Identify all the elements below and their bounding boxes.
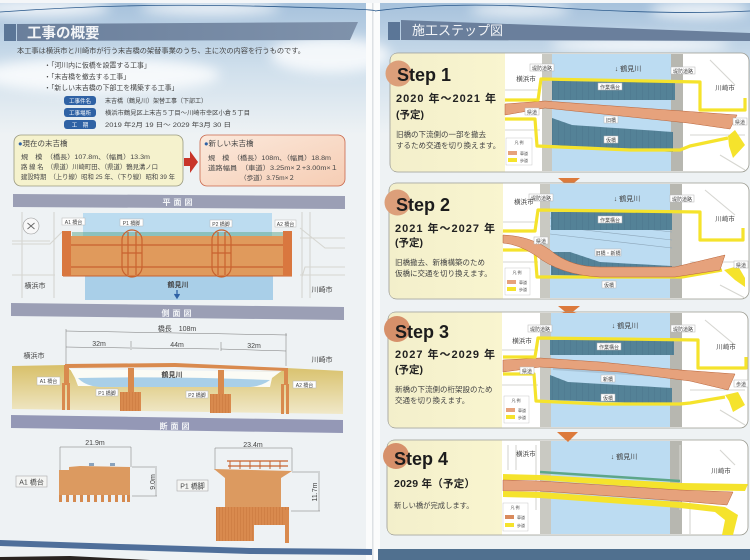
side view diagram: 横浜市 — [24, 351, 44, 360]
map labels: 県道 — [527, 109, 537, 116]
work item list — [44, 60, 178, 92]
section bar: cross-section — [11, 415, 343, 433]
side view diagram: P2 橋脚 — [188, 392, 206, 399]
plan labels — [62, 218, 296, 228]
step 2 text: 仮橋に交通を切り換えます。 — [395, 268, 492, 278]
side view diagram: A2 橋台 — [296, 382, 313, 389]
step 2 text: Step 2 — [396, 195, 450, 215]
panel: new bridge: ●新しい末吉橋 — [204, 138, 254, 148]
step 2 text — [395, 195, 495, 278]
step 2 text: 2021 年～2027 年 — [395, 221, 495, 235]
legend: 車道 — [518, 407, 526, 413]
bridge deck — [65, 363, 287, 371]
icon: step 2 circle — [384, 190, 410, 216]
intro text: 本工事は横浜市と川崎市が行う末吉橋の架替事業のうち、主に次の内容を行うものです。 — [17, 46, 305, 55]
map: step 3: 歩道 — [736, 381, 746, 388]
map: step 2: 横浜市 — [514, 197, 534, 206]
heading: 施工ステップ図 — [388, 20, 750, 41]
step 2 text: (予定) — [395, 237, 423, 249]
map: step 2: 県道 — [536, 238, 546, 245]
project details: 末吉橋（鶴見川）架替工事（下部工） — [105, 97, 207, 105]
cross-section P1 pier: 11.7m — [312, 482, 319, 501]
panel: new bridge — [200, 135, 345, 186]
arrow: step 3 to 4 — [557, 432, 578, 442]
step 1 text: 旧橋の下流側の一部を撤去 — [396, 129, 486, 139]
map: step 3: 堤防道路 — [530, 326, 550, 333]
step 3 text: 交通を切り換えます。 — [395, 395, 469, 405]
legend: 歩道 — [518, 414, 526, 420]
map: step 3: 新橋 — [603, 376, 613, 383]
map: step 3: 県道 — [522, 368, 532, 375]
map labels: 堤防道路 — [673, 68, 693, 75]
section bar: side view — [11, 303, 344, 320]
cross-section A1 abutment: A1 橋台 — [19, 478, 44, 486]
compass — [23, 218, 39, 234]
map: step 2: 堤防道路 — [672, 196, 692, 203]
section bar: cross-section: 断面図 — [160, 421, 192, 431]
section bar: side view: 側面図 — [162, 308, 194, 318]
step 3 text: 新橋の下流側の桁架設のため — [395, 384, 492, 394]
heading: 工事の概要: 工事の概要 — [27, 24, 100, 42]
step 4 text: 2029 年（予定） — [394, 477, 475, 490]
step 2 text: 旧橋撤去、新橋構築のため — [395, 257, 485, 267]
legend: 歩道 — [519, 286, 527, 292]
heading: 施工ステップ図: 施工ステップ図 — [412, 23, 503, 38]
plan view diagram — [12, 212, 345, 300]
panel: current bridge: 規 模 （橋長）107.8m、（幅員）13.3m — [21, 152, 150, 161]
legend — [505, 268, 530, 295]
plan labels: A2 橋台 — [277, 221, 294, 228]
map labels: 旧橋 — [606, 117, 616, 124]
side view diagram: P1 橋脚 — [98, 390, 116, 397]
map: step 4: 川崎市 — [711, 466, 731, 475]
plan labels: P1 橋脚 — [123, 220, 140, 227]
work item list: ・「末吉橋を撤去する工事」 — [44, 72, 130, 81]
map: step 2: 旧橋・新橋 — [595, 250, 621, 257]
work item list: ・「新しい末吉橋の下部工を構築する工事」 — [44, 83, 178, 92]
arrow: current to new — [184, 151, 198, 173]
panel: step 4 — [383, 440, 748, 535]
side view diagram: 32m — [92, 341, 106, 348]
step 4 text: 新しい橋が完成します。 — [394, 501, 474, 510]
legend — [504, 396, 529, 423]
side dimensions — [66, 329, 287, 366]
step 1 text: Step 1 — [397, 65, 451, 85]
legend: 凡 例 — [510, 504, 520, 510]
panel: step 3 — [384, 312, 748, 428]
legend: 車道 — [520, 150, 528, 156]
side view diagram: 鶴見川 — [162, 370, 182, 379]
project details: 工事件名 — [69, 97, 91, 105]
map: step 3: 作業構台 — [599, 344, 619, 351]
step 1 text: 2020 年～2021 年 — [396, 91, 496, 105]
map labels: 仮橋 — [606, 137, 616, 144]
icon: step 3 circle — [384, 316, 410, 342]
map: step 2: ↓ 鶴見川 — [614, 194, 640, 203]
P2 pier plan — [212, 230, 231, 277]
section bar: plan view: 平面図 — [162, 198, 196, 207]
project details — [64, 96, 250, 129]
map: step 1: 横浜市 — [516, 74, 536, 83]
arrow: step 2 to 3 — [558, 306, 580, 315]
plan view diagram: 鶴見川 — [168, 280, 188, 289]
arrow: step 1 to 2 — [558, 178, 580, 187]
map labels: 堤防道路 — [532, 65, 552, 72]
section bar: plan view — [13, 194, 345, 209]
side view diagram: 44m — [170, 342, 184, 349]
map labels: 県道 — [735, 119, 745, 126]
panel: step 2 — [384, 183, 749, 299]
cross-section P1 pier — [177, 442, 320, 543]
map: step 2 — [503, 184, 748, 298]
icon: step 1 circle — [386, 60, 412, 86]
cross-section A1 abutment: 21.9m — [85, 440, 105, 447]
cross-section A1 abutment: 9.0m — [150, 474, 157, 490]
step 3 text: Step 3 — [395, 322, 449, 342]
step 3 text: (予定) — [395, 364, 423, 376]
project details: 工 期 — [72, 122, 89, 129]
legend: 凡 例 — [511, 397, 521, 403]
plan view diagram: 川崎市 — [312, 285, 332, 294]
map: step 3: 仮橋 — [603, 395, 613, 402]
project details: 横浜市鶴見区上末吉５丁目～川崎市幸区小倉５丁目 — [105, 109, 250, 117]
map: step 2: 堤防道路 — [531, 195, 551, 202]
map: step 2: 県道 — [736, 262, 746, 269]
P1 pier plan — [122, 230, 142, 277]
panel: new bridge: （歩道）3.75m×２ — [240, 173, 295, 182]
map: step 3: 堤防道路 — [673, 326, 693, 333]
legend: 凡 例 — [514, 139, 524, 145]
map: step 2: 川崎市 — [715, 214, 735, 223]
map: step 2: 作業構台 — [600, 217, 620, 224]
legend: 車道 — [517, 514, 525, 520]
step 4 text: Step 4 — [394, 449, 448, 469]
panel: current bridge: ●現在の末吉橋 — [18, 138, 68, 148]
map: step 1 — [505, 54, 747, 171]
legend: 車道 — [519, 279, 527, 285]
step 1 text: するため交通を切り換えます。 — [396, 140, 500, 150]
step 1 text — [396, 65, 500, 150]
map: step 4: 横浜市 — [516, 449, 536, 458]
map: step 3: 川崎市 — [716, 342, 736, 351]
panel: current bridge: 建設時期 （上り線）昭和 25 年、（下り線）昭和 39 年 — [21, 172, 176, 181]
side view diagram: 橋長 108m — [158, 324, 196, 333]
plan labels: P2 橋脚 — [212, 221, 230, 228]
project details: 工事場所 — [69, 109, 91, 117]
legend: 凡 例 — [512, 269, 522, 275]
side view diagram: 32m — [247, 343, 261, 350]
map: step 3: 横浜市 — [512, 336, 532, 345]
map: step 4 — [503, 441, 748, 535]
map labels — [525, 64, 747, 144]
icon: step 4 circle — [383, 443, 409, 469]
map: step 1: 川崎市 — [715, 83, 735, 92]
panel: new bridge: 道路幅員 （車道）3.25m×２+3.00m×１ — [208, 163, 338, 172]
step 1 text: (予定) — [396, 109, 424, 121]
plan labels: A1 橋台 — [65, 219, 82, 226]
cross-section P1 pier: 23.4m — [243, 442, 263, 449]
cross-section P1 pier: P1 橋脚 — [180, 482, 205, 490]
plan view diagram: 横浜市 — [24, 281, 46, 290]
cross-section A1 abutment — [16, 440, 157, 502]
step 3 text — [395, 322, 495, 405]
map labels: 作業構台 — [600, 84, 620, 91]
side view diagram: A1 橋台 — [40, 378, 57, 385]
side view diagram — [12, 324, 343, 414]
map: step 1: ↓ 鶴見川 — [615, 64, 641, 73]
step 3 text: 2027 年～2029 年 — [395, 347, 495, 361]
map: step 3 — [502, 313, 748, 427]
project details: 2019 年2月 19 日～ 2029 年3月 30 日 — [105, 121, 231, 129]
map: step 4: ↓ 鶴見川 — [611, 452, 637, 461]
panel: new bridge: 規 模 （橋長）108m、（幅員）18.8m — [208, 153, 331, 162]
legend — [506, 138, 532, 165]
heading: 工事の概要 — [4, 22, 358, 42]
work item list: ・「河川内に仮橋を設置する工事」 — [44, 60, 151, 70]
legend — [503, 503, 528, 531]
map: step 2: 仮橋 — [604, 282, 614, 289]
step 4 text — [394, 449, 475, 510]
map: step 3: ↓ 鶴見川 — [612, 321, 638, 330]
panel: current bridge — [14, 135, 183, 186]
panel: current bridge: 路 線 名 （県道）川崎町田、（県道）鶴見溝ノ口 — [21, 162, 158, 171]
panel: step 1 — [386, 53, 749, 172]
side view diagram: 川崎市 — [312, 355, 332, 364]
legend: 歩道 — [520, 157, 528, 163]
legend: 歩道 — [517, 522, 525, 528]
